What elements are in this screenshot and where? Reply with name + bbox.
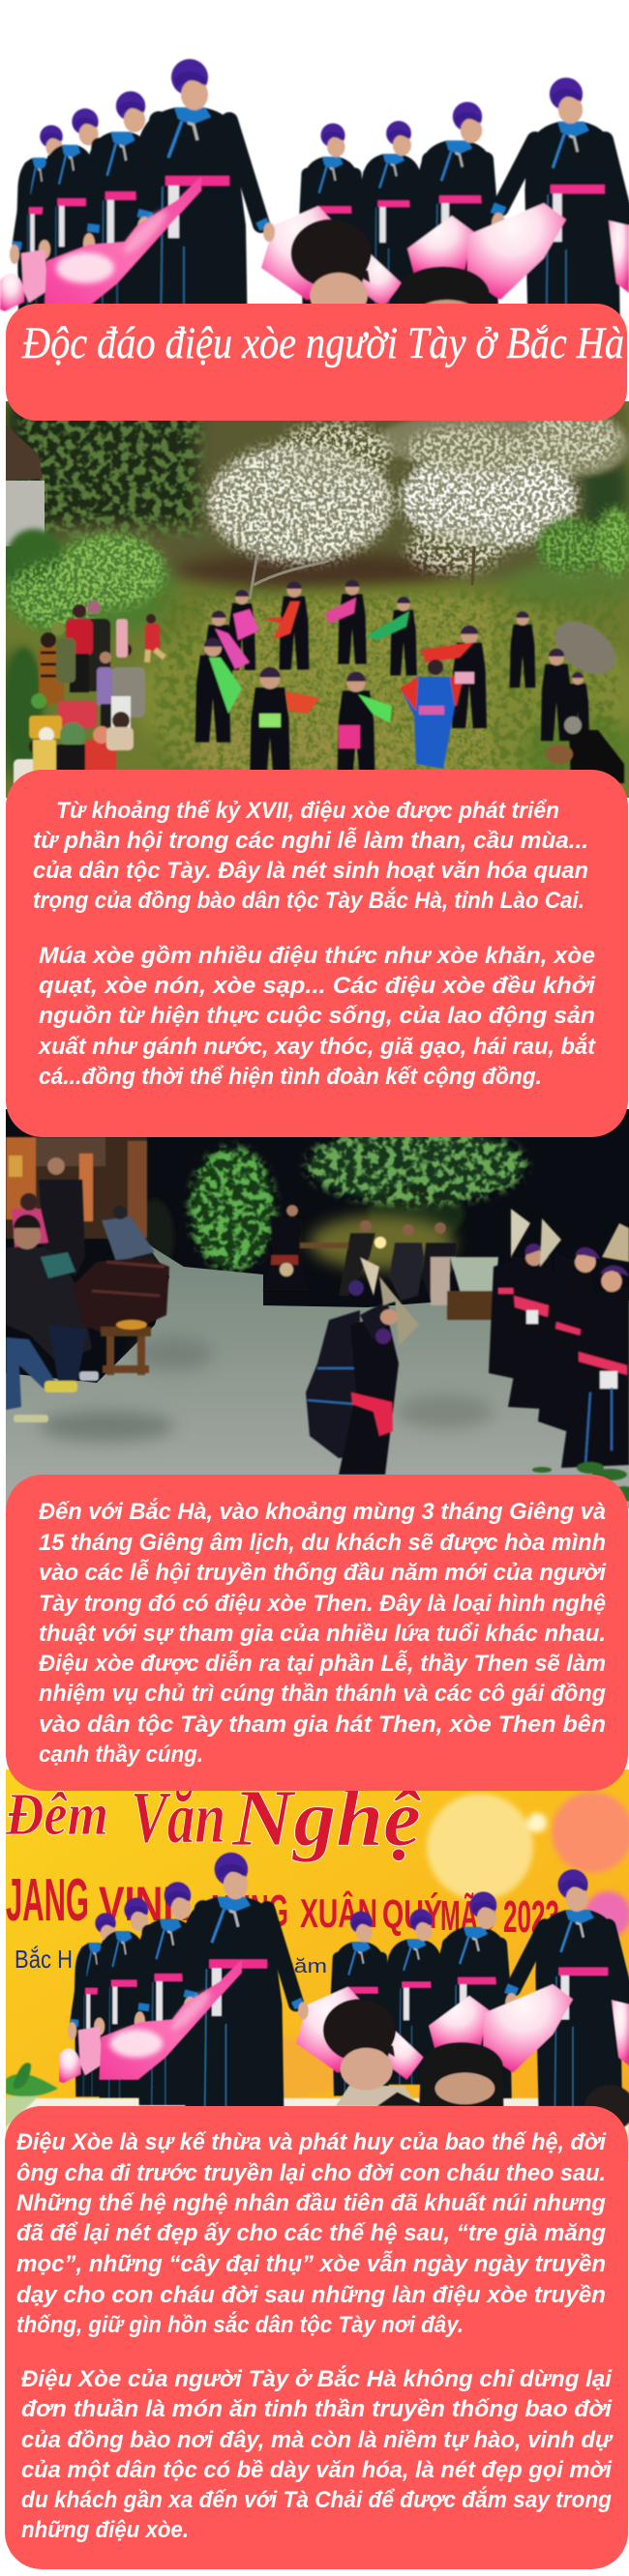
text: heritage paragraph bbox=[16, 2129, 607, 2338]
text: festival paragraph: Điệu xòe được diễn ra tại phần Lễ, thầy Then sẽ làm bbox=[39, 1650, 606, 1677]
text: second paragraph: xuất như gánh nước, xay thóc, giã gạo, hái rau, bắt bbox=[37, 1033, 596, 1060]
text: first paragraph: Từ khoảng thế kỷ XVII, điệu xòe được phát triển bbox=[56, 798, 559, 824]
text: festival paragraph: vào các lễ hội truyền thống đầu năm mới của người bbox=[39, 1559, 607, 1586]
text: heritage paragraph: Điệu Xòe là sự kế thừa và phát huy của bao thế hệ, đời bbox=[16, 2129, 607, 2155]
photo: dancers in a circle under plum blossoms bbox=[0, 401, 629, 803]
photo: stage with festive banner and fan dancers bbox=[5, 1770, 629, 2161]
text: pride paragraph: của một dân tộc có bề dày văn hóa, là nét đẹp gọi mời bbox=[21, 2457, 613, 2483]
banner slogan: QUÝ bbox=[382, 1891, 442, 1937]
text: second paragraph bbox=[37, 943, 596, 1090]
panel: Then xòe at New Year festivals bbox=[6, 1475, 628, 1791]
banner slogan: 2023 bbox=[503, 1891, 559, 1942]
photo: night performance with conical hats bbox=[6, 1109, 629, 1508]
text: pride paragraph: của đồng bào nơi đây, mà còn là niềm tự hào, vinh dự bbox=[21, 2427, 614, 2453]
text: heritage paragraph: ông cha đi trước truyền lại cho đời con cháu theo sau. bbox=[16, 2160, 606, 2186]
plum blossom trees bbox=[208, 413, 629, 561]
text: festival paragraph: nhiệm vụ chủ trì cúng thần thánh và các cô gái đồng bbox=[39, 1681, 606, 1707]
banner slogan bbox=[6, 1878, 558, 1973]
forest and grass texture bbox=[19, 411, 203, 537]
text: heritage paragraph: thống, giữ gìn hồn sắc dân tộc Tày nơi đây. bbox=[16, 2311, 464, 2338]
banner decorations bbox=[126, 1792, 629, 2102]
title banner bbox=[6, 304, 627, 421]
banner slogan: MÃO bbox=[440, 1891, 496, 1940]
text: second paragraph: cá...đồng thời thể hiện tình đoàn kết cộng đồng. bbox=[39, 1064, 542, 1090]
text: pride paragraph: Điệu Xòe của người Tày ở Bắc Hà không chỉ dừng lại bbox=[21, 2365, 613, 2392]
text: heritage paragraph: dạy cho con cháu đời sau những làn điệu xòe truyền bbox=[16, 2282, 606, 2308]
hero: cut-out Tày dancers with fans bbox=[0, 59, 629, 341]
spectator at right bbox=[584, 2085, 629, 2131]
fan dancers bbox=[59, 1853, 629, 2111]
musicians and altar bbox=[263, 1205, 498, 1320]
house bbox=[6, 425, 43, 481]
audience bbox=[14, 600, 165, 788]
text: heritage paragraph: Những thế hệ nghệ nhân đầu tiên đã khuất núi nhưng bbox=[16, 2190, 606, 2216]
text: second paragraph: Múa xòe gồm nhiều điệu thức như xòe khăn, xòe bbox=[39, 943, 595, 969]
text: pride paragraph: du khách gần xa đến với Tà Chải để được đắm say trong bbox=[21, 2486, 612, 2513]
text: festival paragraph: vào dân tộc Tày tham gia hát Then, xòe Then bên bbox=[39, 1712, 606, 1738]
text: first paragraph bbox=[33, 798, 588, 914]
banner slogan: VINH bbox=[99, 1877, 191, 1931]
banner slogan: JANG bbox=[6, 1867, 89, 1934]
background foliage bbox=[139, 1137, 524, 1271]
text: second paragraph: quạt, xòe nón, xòe sạp... Các điệu xòe đều khởi bbox=[39, 973, 596, 999]
banner script heading: Văn bbox=[131, 1777, 225, 1859]
text: first paragraph: của dân tộc Tày. Đây là nét sinh hoạt văn hóa quan bbox=[33, 858, 588, 884]
leaves and stage floor bbox=[6, 2063, 629, 2161]
kneeling dancers bbox=[306, 1257, 419, 1475]
text: pride paragraph: đơn thuần là món ăn tinh thần truyền thống bao đời bbox=[21, 2396, 613, 2422]
banner script heading: Đêm bbox=[5, 1782, 108, 1848]
standing dancers bbox=[489, 1209, 629, 1502]
text: festival paragraph bbox=[39, 1498, 607, 1768]
banner slogan: MÙNG bbox=[211, 1886, 288, 1936]
panel: origin of xòe bbox=[6, 770, 628, 1137]
banner slogan: Bắc H bbox=[15, 1945, 73, 1974]
text: heritage paragraph: đã để lại nét đẹp ấy cho các thế hệ sau, “tre già măng bbox=[16, 2220, 606, 2246]
text: first paragraph: trọng của đồng bào dân tộc Tày Bắc Hà, tỉnh Lào Cai. bbox=[33, 887, 584, 914]
text: pride paragraph bbox=[21, 2365, 614, 2543]
text: festival paragraph: 15 tháng Giêng âm lịch, du khách sẽ được hòa mình bbox=[39, 1530, 606, 1556]
text: festival paragraph: cạnh thầy cúng. bbox=[39, 1742, 203, 1768]
banner slogan: năm bbox=[281, 1956, 327, 1977]
text: festival paragraph: Tày trong đó có điệu xòe Then. Đây là loại hình nghệ bbox=[39, 1591, 606, 1617]
banner slogan: XUÂN bbox=[300, 1889, 377, 1936]
text: heritage paragraph: mọc”, những “cây đại thụ” xòe vẫn ngày ngày truyền bbox=[16, 2251, 606, 2277]
text: pride paragraph: những điệu xòe. bbox=[21, 2517, 189, 2543]
text: first paragraph: từ phần hội trong các nghi lễ làm than, cầu mùa... bbox=[33, 827, 588, 854]
building bbox=[6, 1137, 147, 1239]
panel: heritage and pride bbox=[5, 2106, 628, 2569]
concrete yard bbox=[6, 1243, 629, 1508]
text: festival paragraph: thuật với sự tham gia của nhiều lứa tuổi khác nhau. bbox=[39, 1621, 606, 1647]
banner script heading bbox=[6, 1791, 422, 1862]
text: second paragraph: nguồn từ hiện thực cuộc sống, của lao động sản bbox=[39, 1003, 595, 1029]
bushes bbox=[7, 508, 629, 764]
text: festival paragraph: Đến với Bắc Hà, vào khoảng mùng 3 tháng Giêng và bbox=[39, 1498, 606, 1525]
banner script heading: Nghệ bbox=[231, 1773, 422, 1863]
musicians bbox=[510, 611, 624, 783]
dancers in the circle bbox=[195, 580, 487, 787]
audience bbox=[6, 1157, 169, 1422]
